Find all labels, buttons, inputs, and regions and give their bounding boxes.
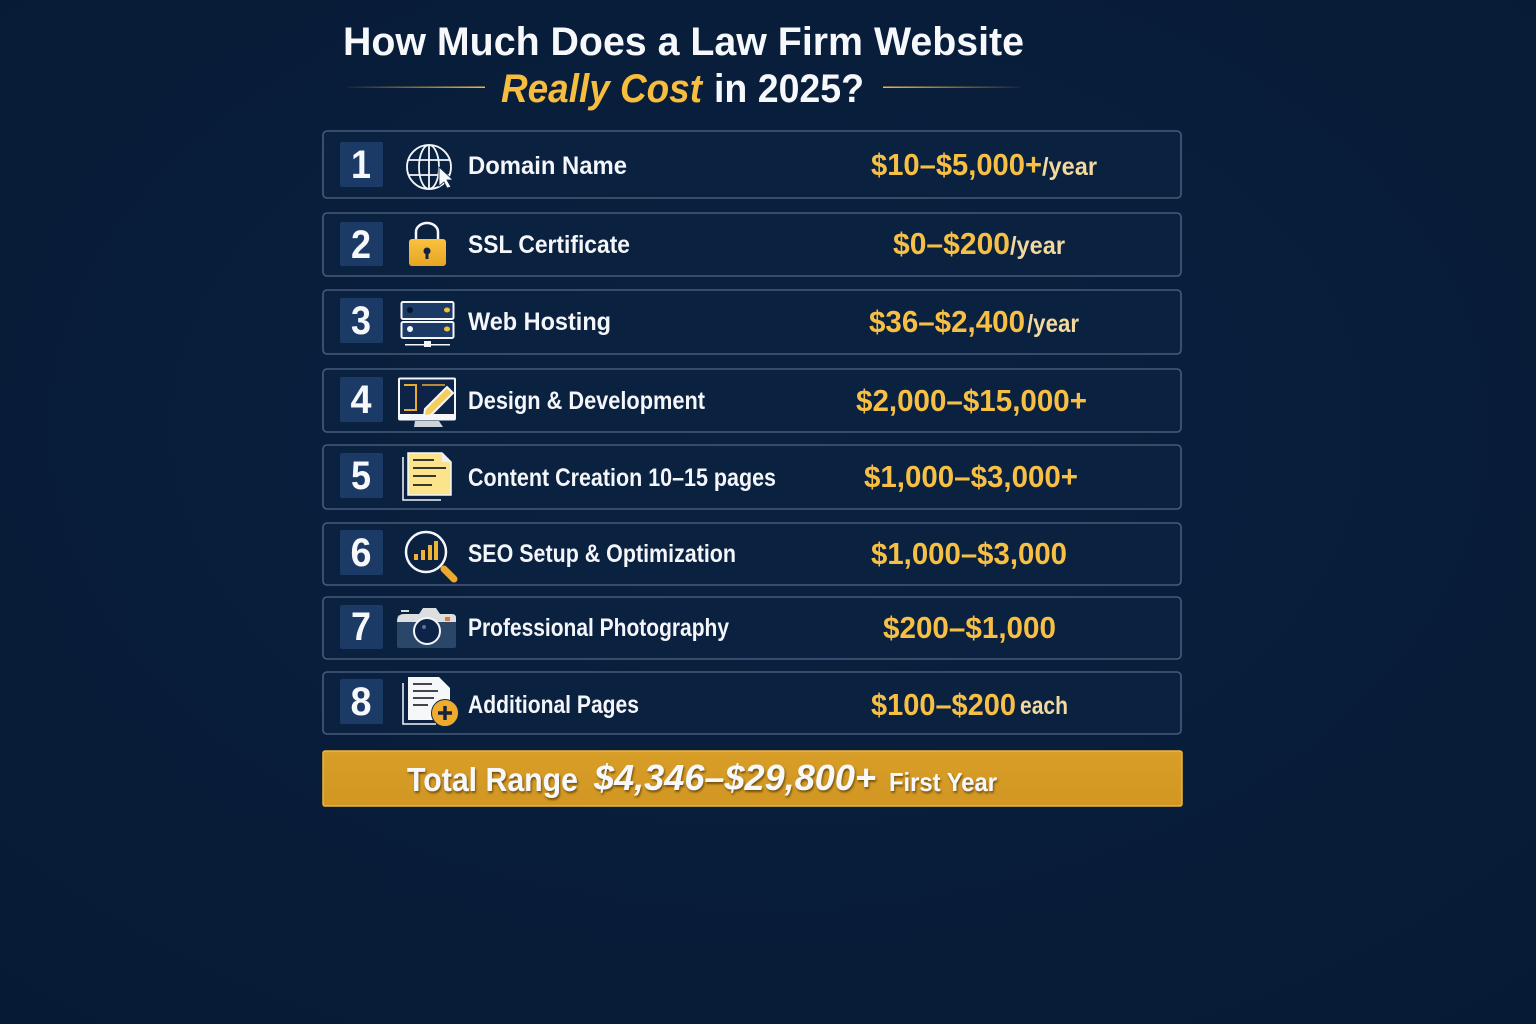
price: /year [1010,232,1065,260]
number badge 5: 5 [351,454,371,498]
number badge 7 [340,605,383,649]
number badge 4 [340,377,383,422]
label: SSL Certificate [468,231,630,259]
number badge 6: 6 [350,531,372,575]
icon: padlock [409,223,446,266]
price: $0–$200 [893,226,1010,261]
price: $100–$200 [871,687,1016,722]
icon: document with plus [403,677,458,726]
price: /year [1027,310,1079,338]
number badge 8: 8 [350,680,372,724]
number badge 7: 7 [351,605,371,649]
label: Content Creation 10–15 pages [468,464,776,492]
number badge 3 [340,298,383,343]
price: $200–$1,000 [883,610,1056,645]
icon: monitor with pencil [399,378,455,427]
label: SEO Setup & Optimization [468,540,736,568]
label: Domain Name [468,152,627,180]
title line 1: How Much Does a Law Firm Website [343,20,1024,64]
price: $36–$2,400 [869,304,1025,339]
row 8: additional pages [323,672,1181,734]
label: Professional Photography [468,614,729,642]
label: Web Hosting [468,308,611,336]
number badge 2 [340,222,383,267]
label: Design & Development [468,387,706,415]
total label: Total Range [407,761,578,798]
title line 2 [347,67,1021,111]
price: $10–$5,000+ [871,147,1042,182]
row 2: ssl certificate [323,213,1181,276]
total amount: $4,346–$29,800+ [593,757,876,798]
price: $1,000–$3,000 [871,536,1067,571]
total range banner [323,751,1182,806]
number badge 8 [340,679,383,724]
row 1: domain name [323,131,1181,198]
number badge 4: 4 [350,378,372,422]
number badge 5 [340,453,383,498]
title line 2: Really Cost [501,67,704,111]
row 4: design and development [323,369,1181,432]
row 7: professional photography [323,597,1181,659]
icon: magnifier with bars [406,532,454,579]
first year note: First Year [889,767,997,797]
price: each [1020,692,1068,720]
price: /year [1042,153,1097,181]
number badge 3: 3 [351,299,371,343]
title [343,20,1024,111]
title line 2: in 2025? [714,67,864,111]
icon: camera [397,608,456,648]
number badge 2: 2 [351,223,371,267]
number badge 1 [340,142,383,187]
icon: server [402,302,454,347]
number badge 1: 1 [351,143,371,187]
icon: document stack [403,453,451,500]
row 6: seo setup [323,523,1181,585]
price: $2,000–$15,000+ [856,383,1087,418]
icon: globe with cursor [407,145,453,189]
label: Additional Pages [468,691,639,719]
row 3: web hosting [323,290,1181,354]
row 5: content creation [323,445,1181,509]
price: $1,000–$3,000+ [864,459,1078,494]
number badge 6 [340,530,383,575]
